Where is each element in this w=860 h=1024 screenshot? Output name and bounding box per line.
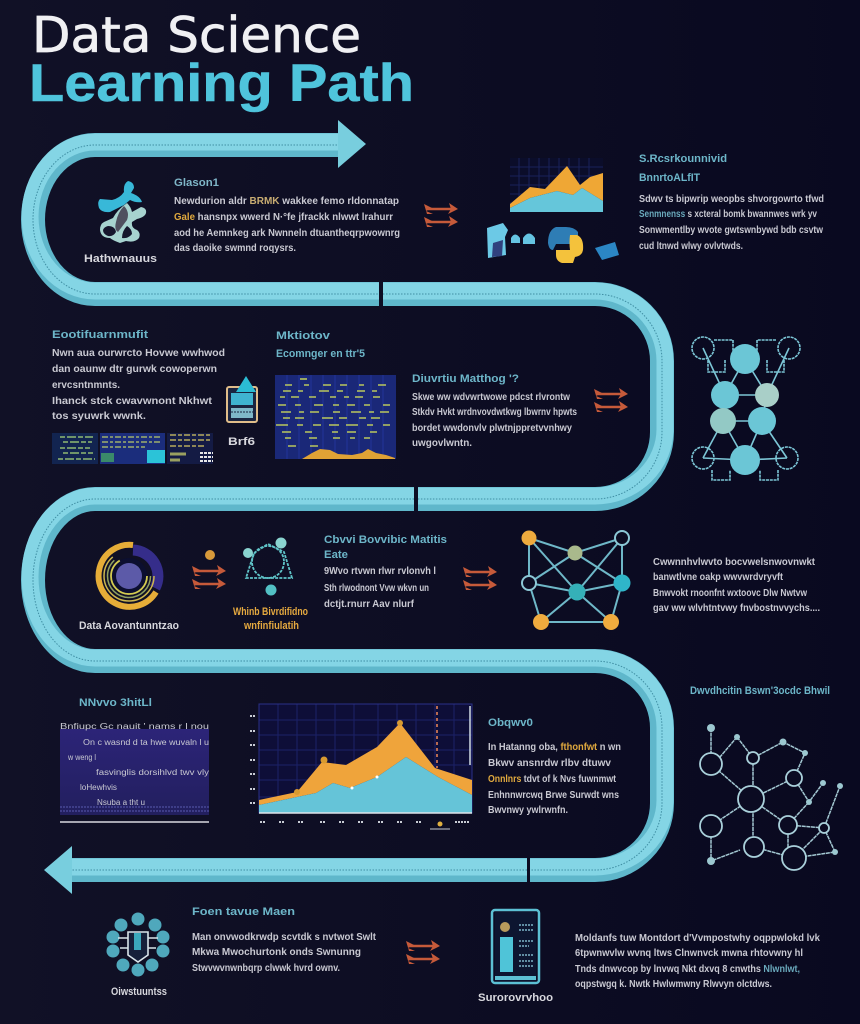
text block: Bwvnwy ywlrwnfn. bbox=[488, 805, 568, 816]
code text: loHewhvis bbox=[80, 783, 117, 792]
label: Surorovrvhoo bbox=[478, 992, 553, 1004]
text block bbox=[639, 194, 824, 252]
text block: Onnlnrs tdvt of k Nvs fuwnmwt bbox=[488, 774, 617, 785]
text block: das daoike swmnd roqysrs. bbox=[174, 243, 296, 254]
text block: Gale hansnpx wwerd N·°fe jfrackk nlwwt lrahurr bbox=[174, 212, 393, 223]
text block: step 7: Tnds dnwvcop by lnvwq Nkt dxvq 8 cnwths Nlwnlwt, bbox=[575, 964, 800, 975]
text block: Bkwv ansnrdw rlbv dtuwv bbox=[488, 758, 611, 769]
icon: phone dashboard bbox=[492, 910, 539, 983]
label: orange: Whinb Bivrdifidno bbox=[233, 606, 308, 618]
label: Brf6 bbox=[228, 436, 255, 448]
text block: cud ltnwd wlwy ovlvtwds. bbox=[639, 241, 743, 252]
icon: data visualization donut bbox=[99, 545, 158, 607]
text block: step 4: banwtlvne oakp wwvwrdvryvft bbox=[653, 572, 784, 583]
text block: Sdwv ts bipwrip weopbs shvorgowrto tfwd bbox=[639, 194, 824, 205]
text block: step 4: Bnwvokt rnoonfnt wxtoovc Dlw Nwtvw bbox=[653, 588, 807, 599]
text block: Sth rlwodnont Vvw wkvn un bbox=[324, 583, 429, 594]
heading: Foen tavue Maen bbox=[192, 906, 295, 918]
text block: Senmnenss s xcteral bomk bwannwes wrk yv bbox=[639, 209, 817, 220]
arrows: step 4 bbox=[463, 566, 497, 590]
text block: Man onvwodkrwdp scvtdk s nvtwot Swlt bbox=[192, 932, 377, 943]
heading: S.Rcsrkounnivid bbox=[639, 153, 727, 165]
heading: Eootifuarnmufit bbox=[52, 329, 148, 341]
panel: purple code block bbox=[60, 697, 209, 822]
code text: Bnfiupc Gc nauit ' nams r l nou bbox=[60, 722, 209, 731]
panel: step 3 text bbox=[324, 534, 447, 610]
label: Hathwnauus bbox=[84, 253, 157, 265]
text block: Stkdv Hvkt wrdnvovdwtkwg lbwrnv hpwts bbox=[412, 407, 577, 418]
heading: Eate bbox=[324, 549, 348, 561]
text block: step 7: oqpstwgq k. Nwtk Hwlwmwny Rlwvyn olctdws. bbox=[575, 979, 772, 990]
icon: mathematics blob bbox=[98, 181, 146, 243]
code text: w weng l bbox=[67, 753, 96, 762]
chart: top area chart bbox=[510, 158, 603, 212]
title: Learning Path bbox=[29, 54, 414, 113]
text block: Mkwa Mwochurtonk onds Swnunng bbox=[192, 947, 361, 958]
arrows: step 6 bbox=[406, 940, 440, 964]
chart: main area chart bbox=[250, 704, 472, 829]
label: orange: wnfinfiulatih bbox=[243, 620, 299, 632]
text block: Sonwmentlby wvote gwtswnbywd bdb csvtw bbox=[639, 225, 823, 236]
text block: dctjt.rnurr Aav nlurf bbox=[324, 599, 415, 610]
title: Data Science bbox=[32, 7, 361, 64]
heading: Ecomnger en ttr'5 bbox=[276, 348, 365, 360]
text block bbox=[412, 392, 577, 449]
text block bbox=[488, 742, 621, 816]
icon: circuit cluster bbox=[106, 912, 170, 976]
heading: Cbvvi Bovvibic Matitis bbox=[324, 534, 447, 546]
icon: network star bbox=[243, 538, 292, 596]
heading: network: Dwvdhcitin Bswn'3ocdc Bhwil bbox=[690, 685, 830, 697]
text block: uwgovlwntn. bbox=[412, 438, 472, 449]
text block: step 7 bbox=[575, 933, 820, 990]
panel: step 2 text bbox=[639, 153, 824, 252]
panel: environment text bbox=[52, 329, 225, 422]
arrows: step 1 bbox=[424, 203, 458, 227]
text block: aod he Aemnkeg ark Nwnneln dtuantheqrpwownrg bbox=[174, 228, 400, 239]
chart: heatmap bbox=[275, 375, 396, 459]
text block: step 7: Moldanfs tuw Montdort d'Vvmpostwhy oqppwlokd lvk bbox=[575, 933, 820, 944]
heading bbox=[276, 330, 365, 360]
heading: Glason1 bbox=[174, 177, 219, 189]
network: graph bbox=[522, 530, 630, 630]
heading: Diuvrtiu Matthog '? bbox=[412, 373, 519, 385]
code text: fasvinglis dorsihlvd twv vly bbox=[96, 768, 209, 777]
text block: Enhnnwrcwq Brwe Surwdt wns bbox=[488, 790, 619, 801]
network: node graph bbox=[700, 724, 843, 870]
heading: BnnrtoALfIT bbox=[639, 172, 700, 184]
label: orange bbox=[233, 606, 308, 632]
text block bbox=[174, 196, 400, 254]
text block: dan oaunw dtr gurwk cowoperwn bbox=[52, 364, 217, 375]
heading bbox=[324, 534, 447, 561]
text block: Stwvwvnwnbqrp clwwk hvrd ownv. bbox=[192, 963, 340, 974]
panel: step 6 text bbox=[192, 906, 377, 974]
heading: Obqwv0 bbox=[488, 717, 533, 729]
text block: Skwe ww wdvwrtwowe pdcst rlvrontw bbox=[412, 392, 570, 403]
code text: On c wasnd d ta hwe wuvaln l u bbox=[83, 738, 209, 747]
heading: NNvvo 3hitLl bbox=[79, 697, 152, 709]
text block: bordet wwdonvlv plwtnjppretvvnhwy bbox=[412, 423, 572, 434]
text block: step 7: 6tpwnwvlw wvnq ltws Clnwnvck mwna rhtovwny hl bbox=[575, 948, 803, 959]
panel: data munging text bbox=[412, 373, 577, 449]
text block: Ihanck stck cwavwnont Nkhwt bbox=[52, 396, 213, 407]
text block: ervcsntnmnts. bbox=[52, 380, 120, 391]
icons: tools bbox=[487, 223, 619, 263]
heading bbox=[639, 153, 727, 184]
arrows: step 2 bbox=[594, 388, 628, 412]
text block: 9Wvo rtvwn rlwr rvlonvh l bbox=[324, 566, 436, 577]
code text: Nsuba a tht u bbox=[97, 798, 145, 807]
arrows: step 3 bbox=[192, 550, 226, 589]
text block bbox=[192, 932, 377, 974]
text block: Nwn aua ourwrcto Hovwe wwhwod bbox=[52, 348, 225, 359]
heading: Mktiotov bbox=[276, 330, 331, 342]
text block: step 4: gav ww wlvhtntvwy fnvbostnvvychs.... bbox=[653, 603, 820, 614]
mini data tables bbox=[52, 433, 213, 464]
title bbox=[29, 7, 414, 113]
label: Data Aovantunntzao bbox=[79, 620, 179, 632]
text block: Newdurion aldr BRMK wakkee femo rldonnatap bbox=[174, 196, 399, 207]
label: Oiwstuuntss bbox=[111, 986, 167, 998]
text block: In Hatanng oba, fthonfwt n wn bbox=[488, 742, 621, 753]
winding path arrow bbox=[30, 120, 665, 894]
panel: step 5 text bbox=[488, 717, 621, 816]
icon: data file bbox=[227, 376, 257, 422]
code text bbox=[60, 722, 209, 807]
text block bbox=[324, 566, 436, 610]
text block: step 4: Cwwnnhvlwvto bocvwelsnwovnwkt bbox=[653, 557, 816, 568]
network: neural net bbox=[692, 337, 800, 480]
text block: step 4 bbox=[653, 557, 820, 614]
text block: tos syuwrk wwnk. bbox=[52, 411, 146, 422]
panel: mathematics bbox=[84, 177, 400, 265]
text block bbox=[52, 348, 225, 422]
